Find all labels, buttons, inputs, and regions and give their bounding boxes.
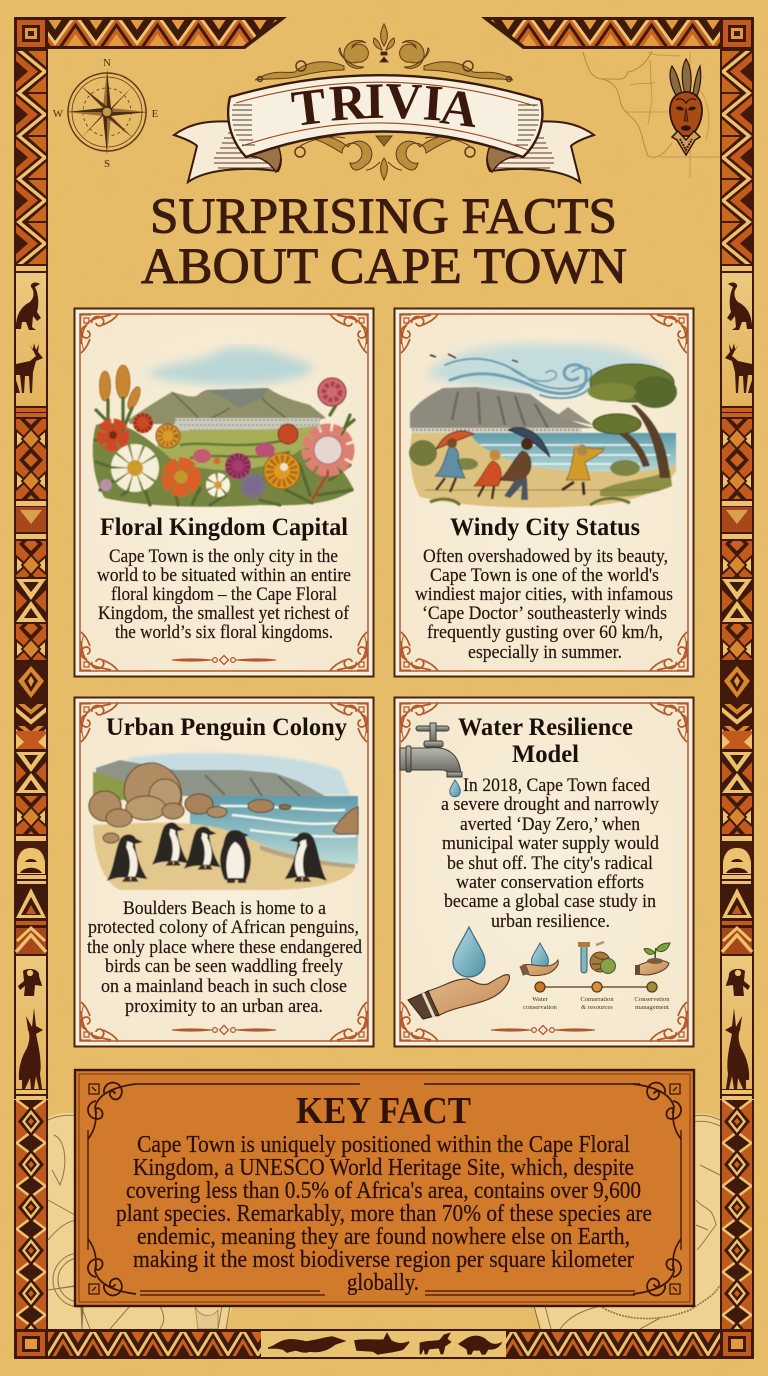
icon: compass rose: N xyxy=(103,57,111,69)
card body text: urban resilience. xyxy=(491,911,610,932)
icon: compass rose: E xyxy=(152,108,159,120)
whale silhouette xyxy=(355,1334,409,1354)
card title: Floral Kingdom Capital xyxy=(100,514,348,541)
armadillo silhouette xyxy=(459,1336,501,1354)
card body text: averted ‘Day Zero,’ when xyxy=(460,814,640,835)
card body text: especially in summer. xyxy=(468,642,622,663)
title: TRIVIA: I xyxy=(364,74,385,130)
sand xyxy=(410,433,676,508)
card body text: frequently gusting over 60 km/h, xyxy=(427,622,663,643)
flower spikes xyxy=(100,365,143,411)
card body text: became a global case study in xyxy=(444,891,656,912)
red bud xyxy=(278,424,298,444)
sea xyxy=(468,433,676,473)
stems and leaves xyxy=(95,395,354,505)
card body text: birds can be seen waddling freely xyxy=(105,956,343,977)
panel: Windy City Status xyxy=(394,308,694,676)
chart: three step conservation timeline: & resources xyxy=(581,1004,613,1011)
orange poppy xyxy=(170,466,192,488)
ornament above the ribbon xyxy=(255,24,513,80)
penguin 5 xyxy=(285,832,327,882)
card body text: proximity to an urban area. xyxy=(125,996,323,1017)
banner: TRIVIA ribbon xyxy=(174,24,594,182)
ornament below the ribbon xyxy=(295,136,475,180)
ribbon right tail xyxy=(487,121,594,182)
penguin 4 xyxy=(220,830,251,883)
card title: Water Resilience xyxy=(458,714,633,741)
otters silhouette xyxy=(268,1337,344,1352)
card body text: windiest major cities, with infamous xyxy=(415,584,673,605)
chart: three step conservation timeline: Conservetion xyxy=(634,996,670,1003)
ribbon centre xyxy=(228,75,542,157)
pink bud xyxy=(193,449,211,463)
card body text xyxy=(97,546,351,643)
key fact body text: plant species. Remarkably, more than 70% of these species are xyxy=(116,1201,652,1227)
illustration: Table Mountain with fynbos flowers xyxy=(93,348,354,507)
birds xyxy=(430,354,518,362)
wind swirl xyxy=(445,359,591,398)
penguin 3 xyxy=(184,827,221,870)
card body text: world to be situated within an entire xyxy=(97,565,351,586)
chart: three step conservation timeline: Comarration xyxy=(580,996,614,1003)
icon: test tube and seed xyxy=(578,942,616,974)
card body text: the only place where these endangered xyxy=(87,937,362,958)
title: TRIVIA: R xyxy=(328,74,369,133)
key fact body text: globally. xyxy=(347,1270,419,1296)
magenta flower xyxy=(225,453,251,479)
icon: water tap xyxy=(400,723,462,777)
card body text: Often overshadowed by its beauty, xyxy=(423,546,668,567)
white daisy xyxy=(121,454,149,482)
card body text: municipal water supply would xyxy=(442,833,659,854)
chart: three step conservation timeline: management xyxy=(635,1004,669,1011)
yellow pincushion xyxy=(156,424,180,448)
card title: Windy City Status xyxy=(450,514,640,541)
icon: hand with seedling xyxy=(635,943,670,975)
pink thistle xyxy=(255,443,275,457)
card body text xyxy=(87,898,362,1017)
map: top right Africa outline xyxy=(583,51,720,178)
tree small xyxy=(616,428,650,467)
card body text: In 2018, Cape Town faced xyxy=(463,775,650,796)
mountain xyxy=(410,387,595,428)
illustration: penguins on Boulders Beach xyxy=(89,753,358,890)
chart: three step conservation timeline: Water xyxy=(532,996,549,1003)
panel: Floral Kingdom Capital xyxy=(74,308,374,676)
card title: Urban Penguin Colony xyxy=(106,714,347,741)
icon: large drop above hand xyxy=(408,927,509,1019)
moose silhouette xyxy=(420,1333,451,1354)
card title xyxy=(458,714,633,768)
card body text: Kingdom, the smallest yet richest of xyxy=(98,603,350,624)
red round flower xyxy=(133,413,153,433)
title: TRIVIA: T xyxy=(289,78,329,138)
card body text xyxy=(441,775,659,932)
card body text: water conservation efforts xyxy=(456,872,644,893)
ribbon left tail xyxy=(174,121,281,182)
heading: surprising facts about Cape Town: SURPRISING FACTS xyxy=(150,189,617,245)
chart: three step conservation timeline: conservation xyxy=(523,1004,558,1011)
icon: compass rose: S xyxy=(104,158,110,170)
card body text: floral kingdom – the Cape Floral xyxy=(111,584,337,605)
foliage mass xyxy=(93,423,354,507)
sand xyxy=(93,823,356,890)
card body text xyxy=(415,546,673,663)
card body text: Cape Town is one of the world's xyxy=(430,565,659,586)
person in yellow coat xyxy=(562,444,604,495)
girl in red xyxy=(474,450,501,499)
title: TRIVIA xyxy=(289,73,481,139)
title: TRIVIA: V xyxy=(384,73,423,131)
card body text: the world’s six floral kingdoms. xyxy=(115,622,333,643)
icon: water droplet xyxy=(450,780,460,797)
large protea xyxy=(307,429,349,471)
icon: tribal mask xyxy=(670,59,702,155)
small white flower xyxy=(211,478,225,492)
card title: Model xyxy=(512,741,579,768)
penguin 1 xyxy=(107,834,147,882)
icon: hand with drop xyxy=(519,943,558,976)
title: TRIVIA: A xyxy=(437,79,481,139)
purple flower xyxy=(245,478,261,494)
small protea xyxy=(318,378,346,406)
sea xyxy=(190,796,358,864)
man with blue umbrella xyxy=(500,428,550,500)
chart: three step conservation timeline xyxy=(519,942,670,1011)
heading: surprising facts about Cape Town: ABOUT CAPE TOWN xyxy=(141,239,627,295)
card body text: protected colony of African penguins, xyxy=(88,917,359,938)
key fact body text: Kingdom, a UNESCO World Heritage Site, which, despite xyxy=(133,1155,634,1181)
card body text: a severe drought and narrowly xyxy=(441,794,659,815)
key fact body text: making it the most biodiverse region per square kilometer xyxy=(133,1247,634,1273)
card body text: be shut off. The city's radical xyxy=(447,853,653,874)
panel: Water Resilience Model xyxy=(394,698,694,1046)
key fact body text: endemic, meaning they are found nowhere else on Earth, xyxy=(137,1224,630,1250)
key fact body text: covering less than 0.5% of Africa's area, contains over 9,600 xyxy=(126,1178,641,1204)
map: lower left sheet xyxy=(48,1113,233,1329)
boulders xyxy=(89,763,358,843)
woman with red umbrella xyxy=(435,431,474,492)
shrubs and grass xyxy=(409,440,437,466)
key fact heading: KEY FACT xyxy=(296,1090,471,1132)
orange dahlia xyxy=(264,453,300,489)
title: TRIVIA: I xyxy=(421,75,445,133)
heading: surprising facts about Cape Town xyxy=(141,189,627,295)
card body text: Cape Town is the only city in the xyxy=(109,546,338,567)
card body text: on a mainland beach in such close xyxy=(101,976,347,997)
card body text: Boulders Beach is home to a xyxy=(123,898,327,919)
map: lower right sheet xyxy=(534,1113,720,1329)
panel: Urban Penguin Colony xyxy=(74,698,374,1046)
bottom border band with animal silhouettes xyxy=(14,1329,754,1359)
penguin 2 xyxy=(152,823,189,866)
icon: compass rose xyxy=(53,57,159,170)
card body text: ‘Cape Doctor’ southeasterly winds xyxy=(422,603,667,624)
tree large xyxy=(631,405,670,478)
key fact body text xyxy=(116,1132,652,1296)
red poppy xyxy=(105,427,121,443)
key fact body text: Cape Town is uniquely positioned within the Cape Floral xyxy=(137,1132,630,1158)
icon: compass rose: W xyxy=(53,108,64,120)
illustration: wind at the beach below Table Mountain xyxy=(409,344,677,508)
panel: Key Fact xyxy=(75,1070,694,1306)
